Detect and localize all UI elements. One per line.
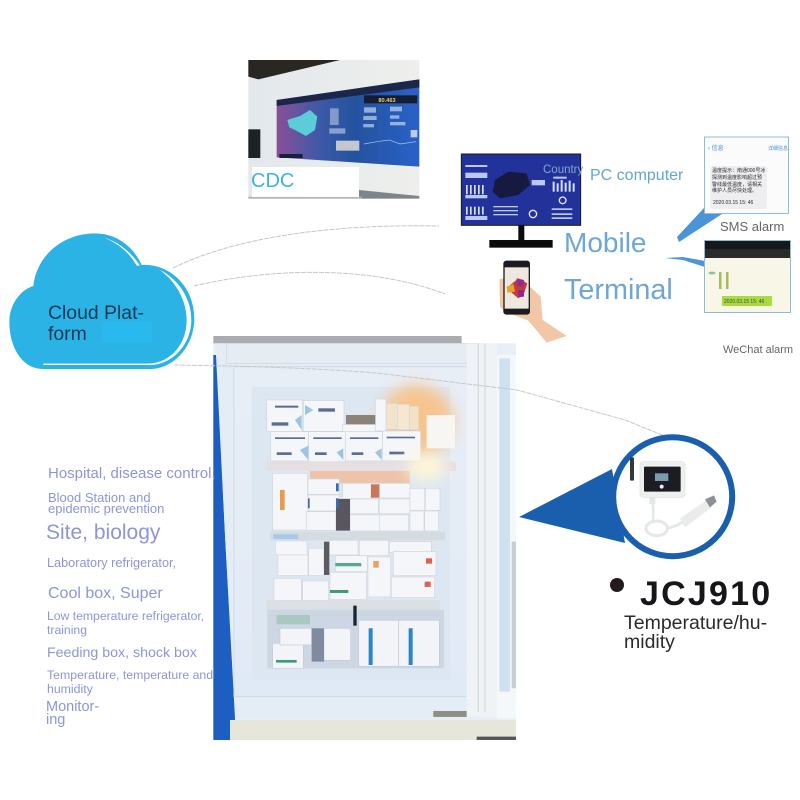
left text: application sites: Feeding box, shock box bbox=[47, 645, 197, 661]
bullet dot bbox=[610, 578, 624, 592]
top shelf boxes bbox=[267, 399, 455, 462]
pointer: SMS bbox=[677, 208, 722, 242]
label: WeChat alarm: WeChat alarm bbox=[723, 344, 793, 356]
left text: application sites: training bbox=[47, 623, 87, 637]
third shelf boxes bbox=[274, 540, 436, 600]
product description: Temperature/hu- bbox=[624, 612, 767, 634]
pointer: WeChat bbox=[665, 257, 705, 267]
second shelf boxes bbox=[273, 473, 440, 531]
product description: midity bbox=[624, 631, 675, 653]
SMS alarm card: 警线最低温度，请相关 bbox=[712, 181, 762, 188]
label: SMS alarm: SMS alarm bbox=[720, 219, 784, 234]
left text: application sites: humidity bbox=[47, 682, 94, 696]
cloud label: form bbox=[48, 323, 87, 345]
left text: application sites: Blood Station and bbox=[48, 490, 151, 505]
SMS alarm card: 2020.03.15 15: 46 bbox=[713, 200, 754, 206]
left text: application sites: Temperature, temperature and bbox=[47, 668, 213, 682]
SMS alarm card: 维护人员尽快处理。 bbox=[712, 187, 757, 194]
fridge photo bbox=[213, 336, 516, 740]
WeChat alarm card bbox=[665, 240, 790, 312]
connector line: cloud to sensor bbox=[174, 365, 667, 437]
label: CDC bbox=[251, 167, 359, 197]
SMS alarm card: 详细信息 bbox=[768, 145, 788, 152]
product name: JCJ910: JCJ910 bbox=[640, 575, 772, 613]
drawer boxes bbox=[267, 610, 444, 668]
photo: CDC monitoring wall bbox=[248, 60, 419, 199]
photo: CDC monitoring wall: 80.463 bbox=[378, 98, 396, 104]
SMS alarm card: 温度提示：南通000号冰 bbox=[712, 167, 765, 174]
WeChat alarm card: 2020.03.15 15: 46 bbox=[724, 299, 765, 305]
sensor callout bbox=[519, 437, 732, 556]
icon: JCJ910 sensor bbox=[630, 457, 717, 536]
label: Terminal: Terminal bbox=[564, 274, 673, 306]
left text: application sites: ing bbox=[46, 712, 65, 728]
SMS alarm card: 探测到温度影响超过预 bbox=[712, 174, 762, 181]
SMS alarm card: ‹ 信息 bbox=[708, 144, 724, 152]
label: PC computer: PC computer bbox=[590, 167, 684, 184]
connector lines from cloud bbox=[173, 226, 445, 294]
left text: application sites: Cool box, Super bbox=[48, 585, 163, 602]
left text: application sites: Laboratory refrigerator, bbox=[47, 556, 176, 570]
label: CDC: CDC bbox=[251, 170, 294, 192]
left text: application sites: epidemic prevention bbox=[48, 501, 164, 516]
left text: application sites: Site, biology bbox=[46, 521, 161, 544]
blue pointer bbox=[519, 469, 625, 543]
label: Country: Country bbox=[543, 164, 584, 176]
left text: application sites: Low temperature refrigerator, bbox=[47, 609, 204, 623]
cloud platform bbox=[9, 233, 194, 369]
left text: application sites bbox=[46, 465, 216, 728]
left text: application sites: Hospital, disease control, bbox=[48, 465, 216, 482]
label: Mobile: Mobile bbox=[564, 227, 646, 258]
SMS alarm card bbox=[677, 137, 788, 242]
phone in hand bbox=[499, 261, 567, 343]
PC monitor bbox=[461, 154, 581, 248]
left text: application sites: Monitor- bbox=[46, 699, 99, 715]
cloud label: Cloud Plat- bbox=[48, 302, 144, 324]
